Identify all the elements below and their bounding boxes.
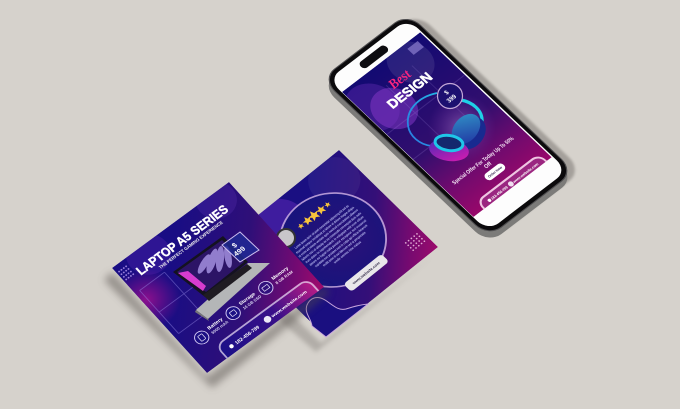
- website pill: www.website.com: [350, 260, 381, 286]
- testimonial text: eiusmod tempor incididunt ut labore et dolore magna aliqua: [295, 206, 355, 255]
- phone number: 182-456-789: [234, 325, 261, 346]
- laptop: [173, 236, 270, 321]
- card: laptop promo: [104, 9, 584, 381]
- feature: memory: [258, 266, 293, 295]
- testimonial text: cupidatat non proident sunt in culpa qui officia deserunt: [314, 223, 369, 268]
- star rating: [298, 202, 331, 229]
- wave shape: [306, 298, 368, 337]
- contact bar: [480, 156, 547, 210]
- contact bar: 182-456-789: [490, 186, 509, 201]
- globe icon: [264, 316, 272, 323]
- card: testimonial back card: [258, 150, 438, 352]
- testimonial text: mollit anim id est laborum sed ut perspiciatis: [322, 231, 367, 267]
- testimonial text: irure dolor in reprehenderit in voluptate velit esse cillum: [305, 215, 365, 264]
- feature: battery: 5000 mAh: [210, 319, 230, 335]
- price badge: 399: [445, 93, 459, 104]
- dot grid: [405, 233, 426, 251]
- subtitle: THE PERFECT GAMING EXPERIENCE: [158, 220, 224, 270]
- screen content: Off: [483, 161, 494, 170]
- feature: memory: 8 GB RAM: [274, 269, 294, 285]
- dot grid: [118, 265, 135, 281]
- contact bar: www.website.com: [511, 162, 540, 184]
- avatar silver edge: [277, 229, 295, 247]
- phone icon: [229, 344, 234, 348]
- feature: memory: Memory: [270, 266, 290, 282]
- feature: battery: [194, 318, 228, 344]
- feature: storage: [226, 293, 262, 320]
- testimonial text: Lorem ipsum dolor sit amet consectetur adipiscing elit sed do: [294, 204, 350, 250]
- feature: storage: Storage: [238, 291, 257, 307]
- price tag: 499: [232, 245, 247, 258]
- script heading: Best: [384, 66, 415, 92]
- phone rim: [321, 13, 575, 238]
- dots: [407, 41, 424, 55]
- price tag: [222, 232, 259, 262]
- price tag: $: [230, 241, 239, 250]
- testimonial text: [294, 205, 368, 268]
- testimonial text: unde omnis iste natus: [333, 240, 362, 264]
- background circles: [346, 84, 400, 130]
- headphones: [408, 93, 496, 164]
- feature: battery: Battery: [206, 317, 225, 331]
- offer text: Special Offer For Today Up To 50%: [451, 136, 516, 186]
- feature: storage: 16 GB SSD: [242, 294, 262, 310]
- title: LAPTOP A5 SERIES: [133, 202, 231, 278]
- phone side: [321, 19, 575, 244]
- phone shadow: [330, 13, 583, 237]
- testimonial disc: [280, 192, 387, 288]
- price badge: $: [443, 89, 451, 96]
- screen white: [328, 19, 567, 231]
- testimonial text: dolore eu fugiat nulla pariatur excepteur sint occaecat: [308, 219, 368, 267]
- testimonial text: laboris nisi ut aliquip ex ea commodo consequat duis aute: [301, 211, 362, 261]
- contact bar: [218, 281, 320, 359]
- price badge: [438, 84, 462, 108]
- grid lines: [140, 272, 202, 334]
- bezel: [323, 14, 573, 236]
- notch: [358, 44, 390, 70]
- website pill: [344, 255, 388, 290]
- DESIGN heading: DESIGN: [384, 69, 436, 111]
- card shadow: [104, 272, 330, 388]
- order button: [484, 164, 506, 180]
- website: www.website.com: [269, 289, 308, 319]
- screen content: [342, 32, 552, 217]
- grid lines: [386, 66, 464, 160]
- phone: [328, 18, 576, 238]
- testimonial text: ut enim ad minim veniam quis nostrud exercitation ullamco: [297, 208, 360, 258]
- order button: Order Now: [487, 165, 503, 179]
